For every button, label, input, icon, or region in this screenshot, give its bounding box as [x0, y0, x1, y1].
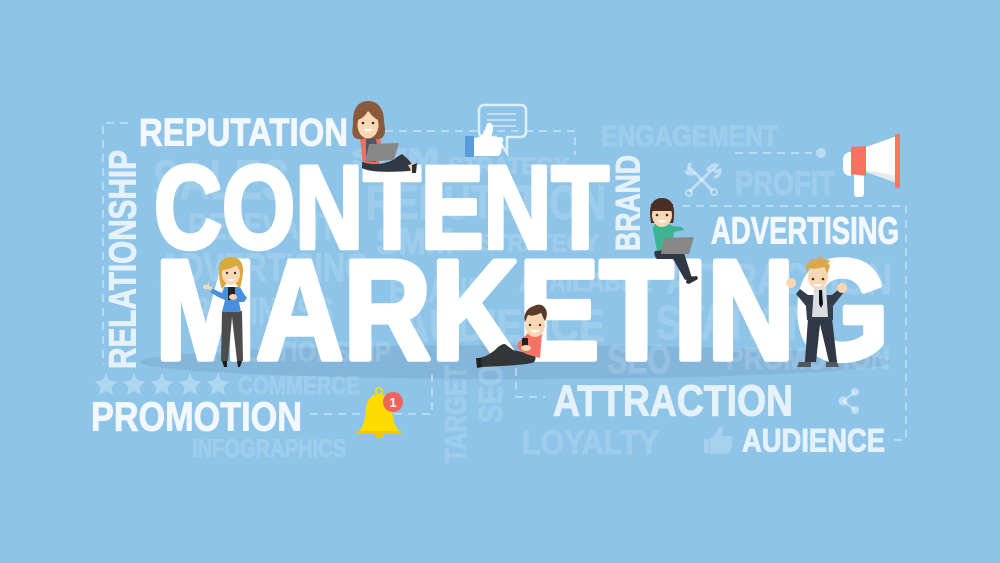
character: woman with laptop top	[352, 101, 417, 173]
character: boy with phone sitting	[476, 305, 547, 368]
icon: chat bubble and thumb	[465, 105, 526, 157]
heading: REPUTATION: REPUTATION	[139, 112, 348, 154]
ghost word cloud: STRATEGY	[448, 153, 569, 180]
icon: tools	[686, 164, 720, 196]
icon: dot	[816, 148, 826, 158]
ghost word cloud: SMM	[376, 221, 454, 262]
ghost word cloud	[153, 120, 892, 463]
ghost word cloud: STRATEGY	[479, 230, 599, 257]
ghost word cloud: RELEVANT	[188, 206, 336, 247]
ghost word cloud: SEO	[607, 338, 671, 382]
character: woman green shirt with laptop	[650, 198, 698, 284]
shadow	[140, 345, 890, 379]
ghost word cloud: ATTRACTION	[666, 255, 892, 304]
ghost word cloud: AVAILABLE	[519, 267, 652, 297]
icon: bell	[357, 388, 403, 438]
ghost word cloud: STATION	[656, 297, 814, 350]
icon: stars	[95, 373, 229, 395]
heading: RELATIONSHIP: RELATIONSHIP	[102, 150, 144, 369]
ghost word cloud: ENGAGEMENT	[601, 120, 778, 153]
ghost word cloud: BUSINESS	[191, 291, 334, 333]
ghost word cloud: BRAND	[389, 272, 487, 310]
ghost word cloud: RELATIONSHIP	[211, 336, 391, 367]
title: CONTENT: CONTENT	[154, 142, 609, 274]
ghost word cloud: TARGET	[438, 365, 473, 463]
ghost word cloud: INFOGRAPHICS	[192, 435, 346, 463]
character: man in suit	[786, 256, 847, 367]
ghost word cloud: SEO	[472, 365, 509, 423]
heading: ATTRACTION: ATTRACTION	[553, 376, 793, 426]
icon: bell: 1	[389, 395, 397, 410]
character: blonde woman with phone	[203, 257, 247, 367]
icon: share	[838, 388, 859, 414]
ghost word cloud: AUDIENCE	[401, 300, 605, 351]
ghost word cloud: ADVERTISING	[159, 246, 369, 290]
ghost word cloud: REPUTATION	[366, 177, 606, 230]
title: MARKETING: MARKETING	[155, 231, 889, 390]
ghost word cloud: COMMERCE	[238, 372, 360, 400]
ghost word cloud: SALES	[153, 148, 289, 211]
ghost word cloud: LOYALTY	[522, 424, 659, 462]
ghost word cloud: SMM	[351, 144, 439, 170]
heading: ADVERTISING: ADVERTISING	[711, 210, 899, 252]
ghost word cloud: PROFIT	[735, 165, 835, 203]
icon: thumb up faded	[704, 426, 732, 454]
heading: BRAND: BRAND	[610, 155, 648, 251]
icon: megaphone	[843, 134, 900, 197]
heading: PROMOTION: PROMOTION	[91, 394, 302, 440]
ghost word cloud: PROMOTION	[726, 341, 890, 376]
heading: AUDIENCE: AUDIENCE	[742, 422, 885, 458]
